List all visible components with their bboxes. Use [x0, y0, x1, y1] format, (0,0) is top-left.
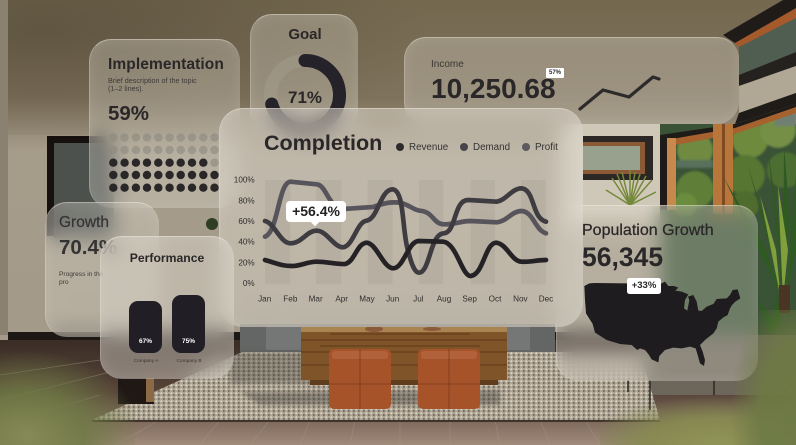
value: 70.4: 70.4% [59, 236, 117, 259]
value: 10,250.68: 10,250.68 [431, 73, 556, 104]
line chart: Nov [513, 294, 529, 303]
badge: 57%: 57% [549, 70, 561, 76]
line chart: Jan [258, 294, 271, 303]
line chart: 0% [243, 278, 255, 288]
description: (1–2 lines). [108, 84, 144, 93]
line chart: May [359, 294, 376, 303]
panel: Completion [219, 108, 583, 327]
panel: Performance [100, 236, 234, 379]
badge: +33%: +33% [632, 280, 656, 291]
spiky plant [724, 145, 796, 300]
tooltip: +56.4%: +56.4% [292, 203, 340, 219]
legend [396, 142, 558, 153]
line chart: 20% [238, 258, 255, 267]
small back window [583, 136, 653, 180]
value: 71%: 71% [288, 88, 322, 107]
legend: Revenue: Revenue [409, 142, 448, 153]
bar: Company B [172, 295, 205, 352]
description: Progress in the [59, 271, 103, 278]
line chart: Apr [335, 294, 348, 303]
panel: Income [404, 37, 739, 124]
bar: Company A: 67% [139, 338, 152, 344]
label: Income: Income [431, 59, 464, 70]
panel: Growth [45, 202, 159, 337]
bar: Company A [129, 300, 162, 352]
line chart: 40% [238, 237, 255, 246]
small plant [606, 170, 656, 205]
description [59, 271, 103, 286]
legend: Demand: Demand [473, 142, 510, 153]
heading: Completion: Completion [264, 131, 382, 155]
label: Company B: Company B [176, 359, 202, 364]
heading: Growth: Growth [59, 214, 109, 231]
dot matrix [109, 133, 219, 192]
heading: Implementation: Implementation [108, 56, 224, 73]
line chart: Oct [489, 294, 502, 303]
ottomans [329, 349, 480, 409]
line chart: Mar [309, 294, 323, 303]
legend: Profit: Profit [535, 142, 558, 153]
line chart [234, 175, 553, 303]
line chart: Aug [437, 294, 452, 303]
coffee table [301, 327, 507, 380]
heading: Population Growth: Population Growth [582, 222, 714, 239]
tooltip: +56.4% [286, 201, 346, 222]
heading: Goal: Goal [288, 26, 322, 43]
description: Brief description of the topic [108, 76, 197, 85]
floor [0, 340, 796, 445]
line chart: Dec [539, 294, 553, 303]
line chart: Sep [462, 294, 477, 303]
description: pro [59, 279, 69, 286]
line chart: 80% [238, 196, 255, 205]
sparkline [578, 75, 661, 111]
panel: Implementation [89, 39, 240, 208]
panel: Goal [250, 14, 358, 134]
legend: Profit [522, 142, 558, 153]
value: 56,345: 56,345 [582, 242, 663, 272]
panel: Population Growth [556, 205, 758, 381]
US map [584, 282, 740, 366]
line chart: 100% [234, 175, 255, 184]
line chart: 60% [238, 216, 255, 226]
rug [92, 352, 660, 420]
donut chart [260, 54, 350, 146]
value: 59%: 59% [108, 102, 149, 125]
line chart: Jun [386, 294, 399, 303]
upper right window [739, 18, 796, 75]
badge: +33% [627, 278, 661, 294]
label: Company A: Company A [134, 359, 158, 364]
description [108, 76, 197, 93]
heading: Performance: Performance [130, 251, 204, 265]
sofa [240, 324, 555, 352]
bar: Company B: 75% [182, 338, 195, 344]
line chart: Jul [413, 294, 424, 303]
chair leg [118, 378, 154, 404]
badge: 57% [546, 68, 564, 78]
large right window [660, 124, 796, 340]
line chart: Feb [283, 294, 298, 303]
door [47, 136, 107, 236]
